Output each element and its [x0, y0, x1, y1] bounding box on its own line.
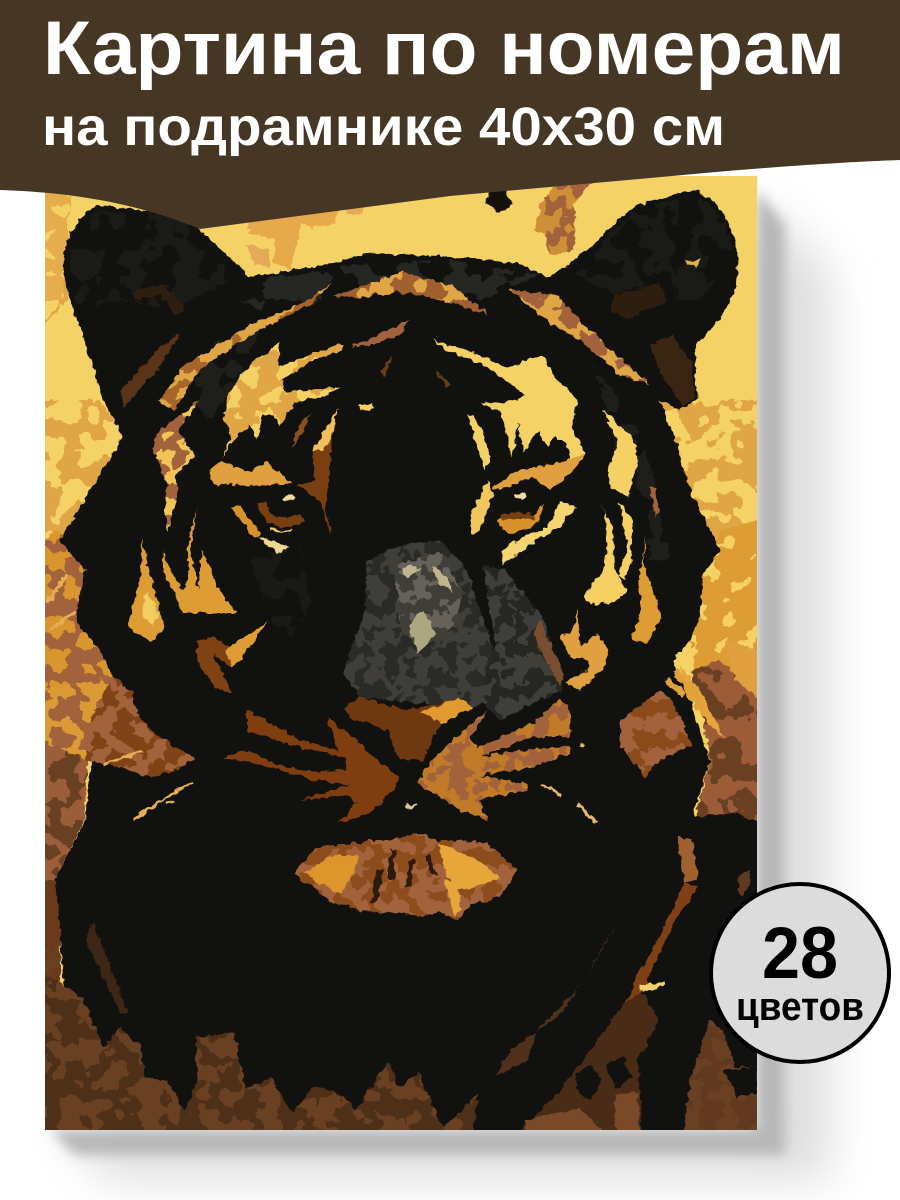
forehead and cheek stripes	[158, 272, 650, 410]
right patch	[620, 690, 692, 777]
badge: 28 colours	[711, 884, 889, 1062]
left fur flecks	[47, 575, 192, 820]
right orange streaks	[666, 670, 705, 715]
left eye	[262, 495, 302, 532]
painting background	[45, 176, 757, 986]
far right stripes	[583, 410, 660, 643]
face stripes: yellow	[208, 403, 585, 570]
tiger body silhouette	[40, 190, 762, 1135]
badge number: 28	[762, 913, 838, 994]
subtitle: на подрамнике 40х30 см	[42, 97, 725, 157]
whisker flecks	[406, 745, 597, 823]
right brow patch	[433, 340, 585, 462]
header banner	[0, 0, 900, 229]
ear and forehead fur texture	[70, 195, 733, 560]
right eye	[497, 493, 543, 533]
ear markings	[120, 260, 701, 407]
bottom fur	[40, 975, 478, 1135]
background paint patches	[40, 175, 762, 830]
chin beard	[293, 832, 517, 920]
orange nose	[345, 697, 473, 760]
left whisker pad	[223, 710, 400, 823]
eyes	[262, 493, 543, 533]
left fur patches	[40, 677, 193, 1000]
canvas shadow	[50, 190, 830, 1180]
nose bridge and muzzle	[250, 540, 565, 720]
badge label: цветов	[736, 985, 864, 1029]
painting: tiger	[40, 170, 762, 1135]
left cheek stripes	[128, 400, 267, 693]
right snarl	[560, 607, 610, 690]
title: Картина по номерам	[43, 6, 845, 91]
bottom right fur	[684, 1020, 757, 1130]
right whisker pad	[417, 700, 570, 820]
left brow patch	[222, 342, 343, 458]
lower body stripes	[86, 837, 750, 1135]
